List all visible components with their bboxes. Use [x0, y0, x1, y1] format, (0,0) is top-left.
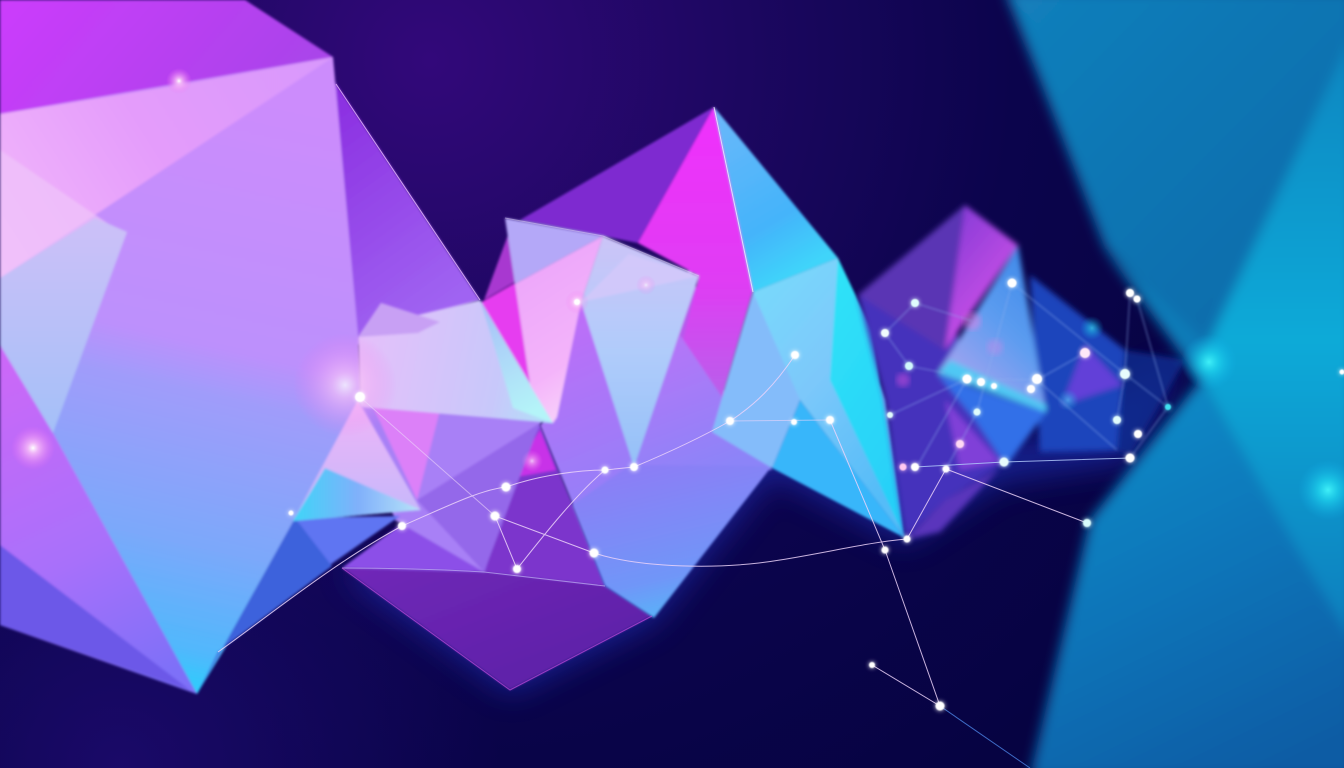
- right shard: [1205, 30, 1344, 650]
- panel: large left crystal: [0, 0, 480, 694]
- lower cyan facet: [772, 400, 905, 538]
- upper shard: [1005, 0, 1344, 345]
- kite facet: [581, 236, 699, 467]
- pale facet C: [515, 236, 603, 423]
- panel: foreground blue shards: [1005, 0, 1344, 768]
- cyan central: [753, 258, 905, 538]
- panel: central crystal: [358, 107, 905, 618]
- magenta facet: [638, 107, 753, 397]
- distant right facets: [1115, 350, 1185, 455]
- upper purple band: [342, 425, 605, 586]
- top facet: [0, 0, 333, 114]
- left cyan facet: [712, 292, 800, 468]
- background tint: lower left: [0, 388, 500, 768]
- blue tip facets: [295, 516, 400, 565]
- back purple facet: [520, 107, 714, 243]
- panel: right distant crystal: [858, 205, 1185, 540]
- glow: pink: [293, 333, 397, 437]
- pale blue left facet: [0, 218, 127, 433]
- lower facets: [938, 375, 1046, 466]
- center blue facet: [938, 245, 1046, 412]
- pale left wash: [0, 150, 110, 278]
- dim distant network lines: [885, 283, 1168, 469]
- right back facet: [335, 82, 480, 345]
- panel: bottom purple crystal: [342, 398, 652, 690]
- soft highlights: [11, 68, 1344, 520]
- small facet: [293, 400, 421, 521]
- main face: [0, 57, 362, 694]
- lower diamond: [342, 568, 652, 690]
- glow behind crystals: [342, 360, 1185, 692]
- lower left facet: [0, 345, 197, 694]
- lilac right: [625, 335, 772, 470]
- pink upper band: [0, 57, 333, 278]
- magenta behind pale facets: [480, 283, 530, 385]
- shard underlay: [1032, 100, 1344, 768]
- glow: cyan: [1181, 334, 1237, 390]
- network lines: [218, 355, 1130, 768]
- bright crystal edges: [336, 84, 753, 690]
- lower blue facet: [572, 465, 772, 618]
- light cyan upper facet: [714, 107, 838, 292]
- pale facet A: [358, 300, 553, 423]
- top facets: [858, 205, 965, 350]
- kite underlay: [634, 265, 726, 472]
- network nodes: [288, 278, 1344, 710]
- lilac left: [540, 302, 640, 510]
- left body: [858, 262, 1005, 538]
- lower shard: [1030, 385, 1344, 768]
- pale facet B: [505, 218, 603, 284]
